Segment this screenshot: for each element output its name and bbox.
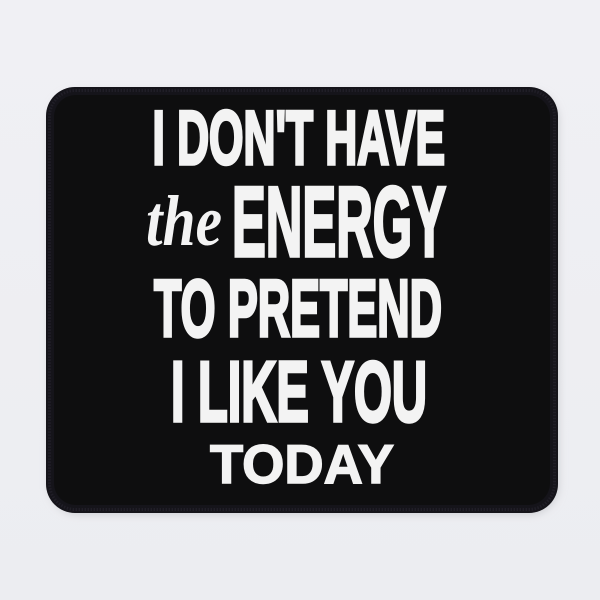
script word: the: the xyxy=(146,181,222,261)
line: TODAY: TODAY xyxy=(210,434,394,495)
mat shadow xyxy=(49,91,559,515)
slogan text xyxy=(146,96,446,495)
black mat with stitched edge xyxy=(46,87,558,513)
